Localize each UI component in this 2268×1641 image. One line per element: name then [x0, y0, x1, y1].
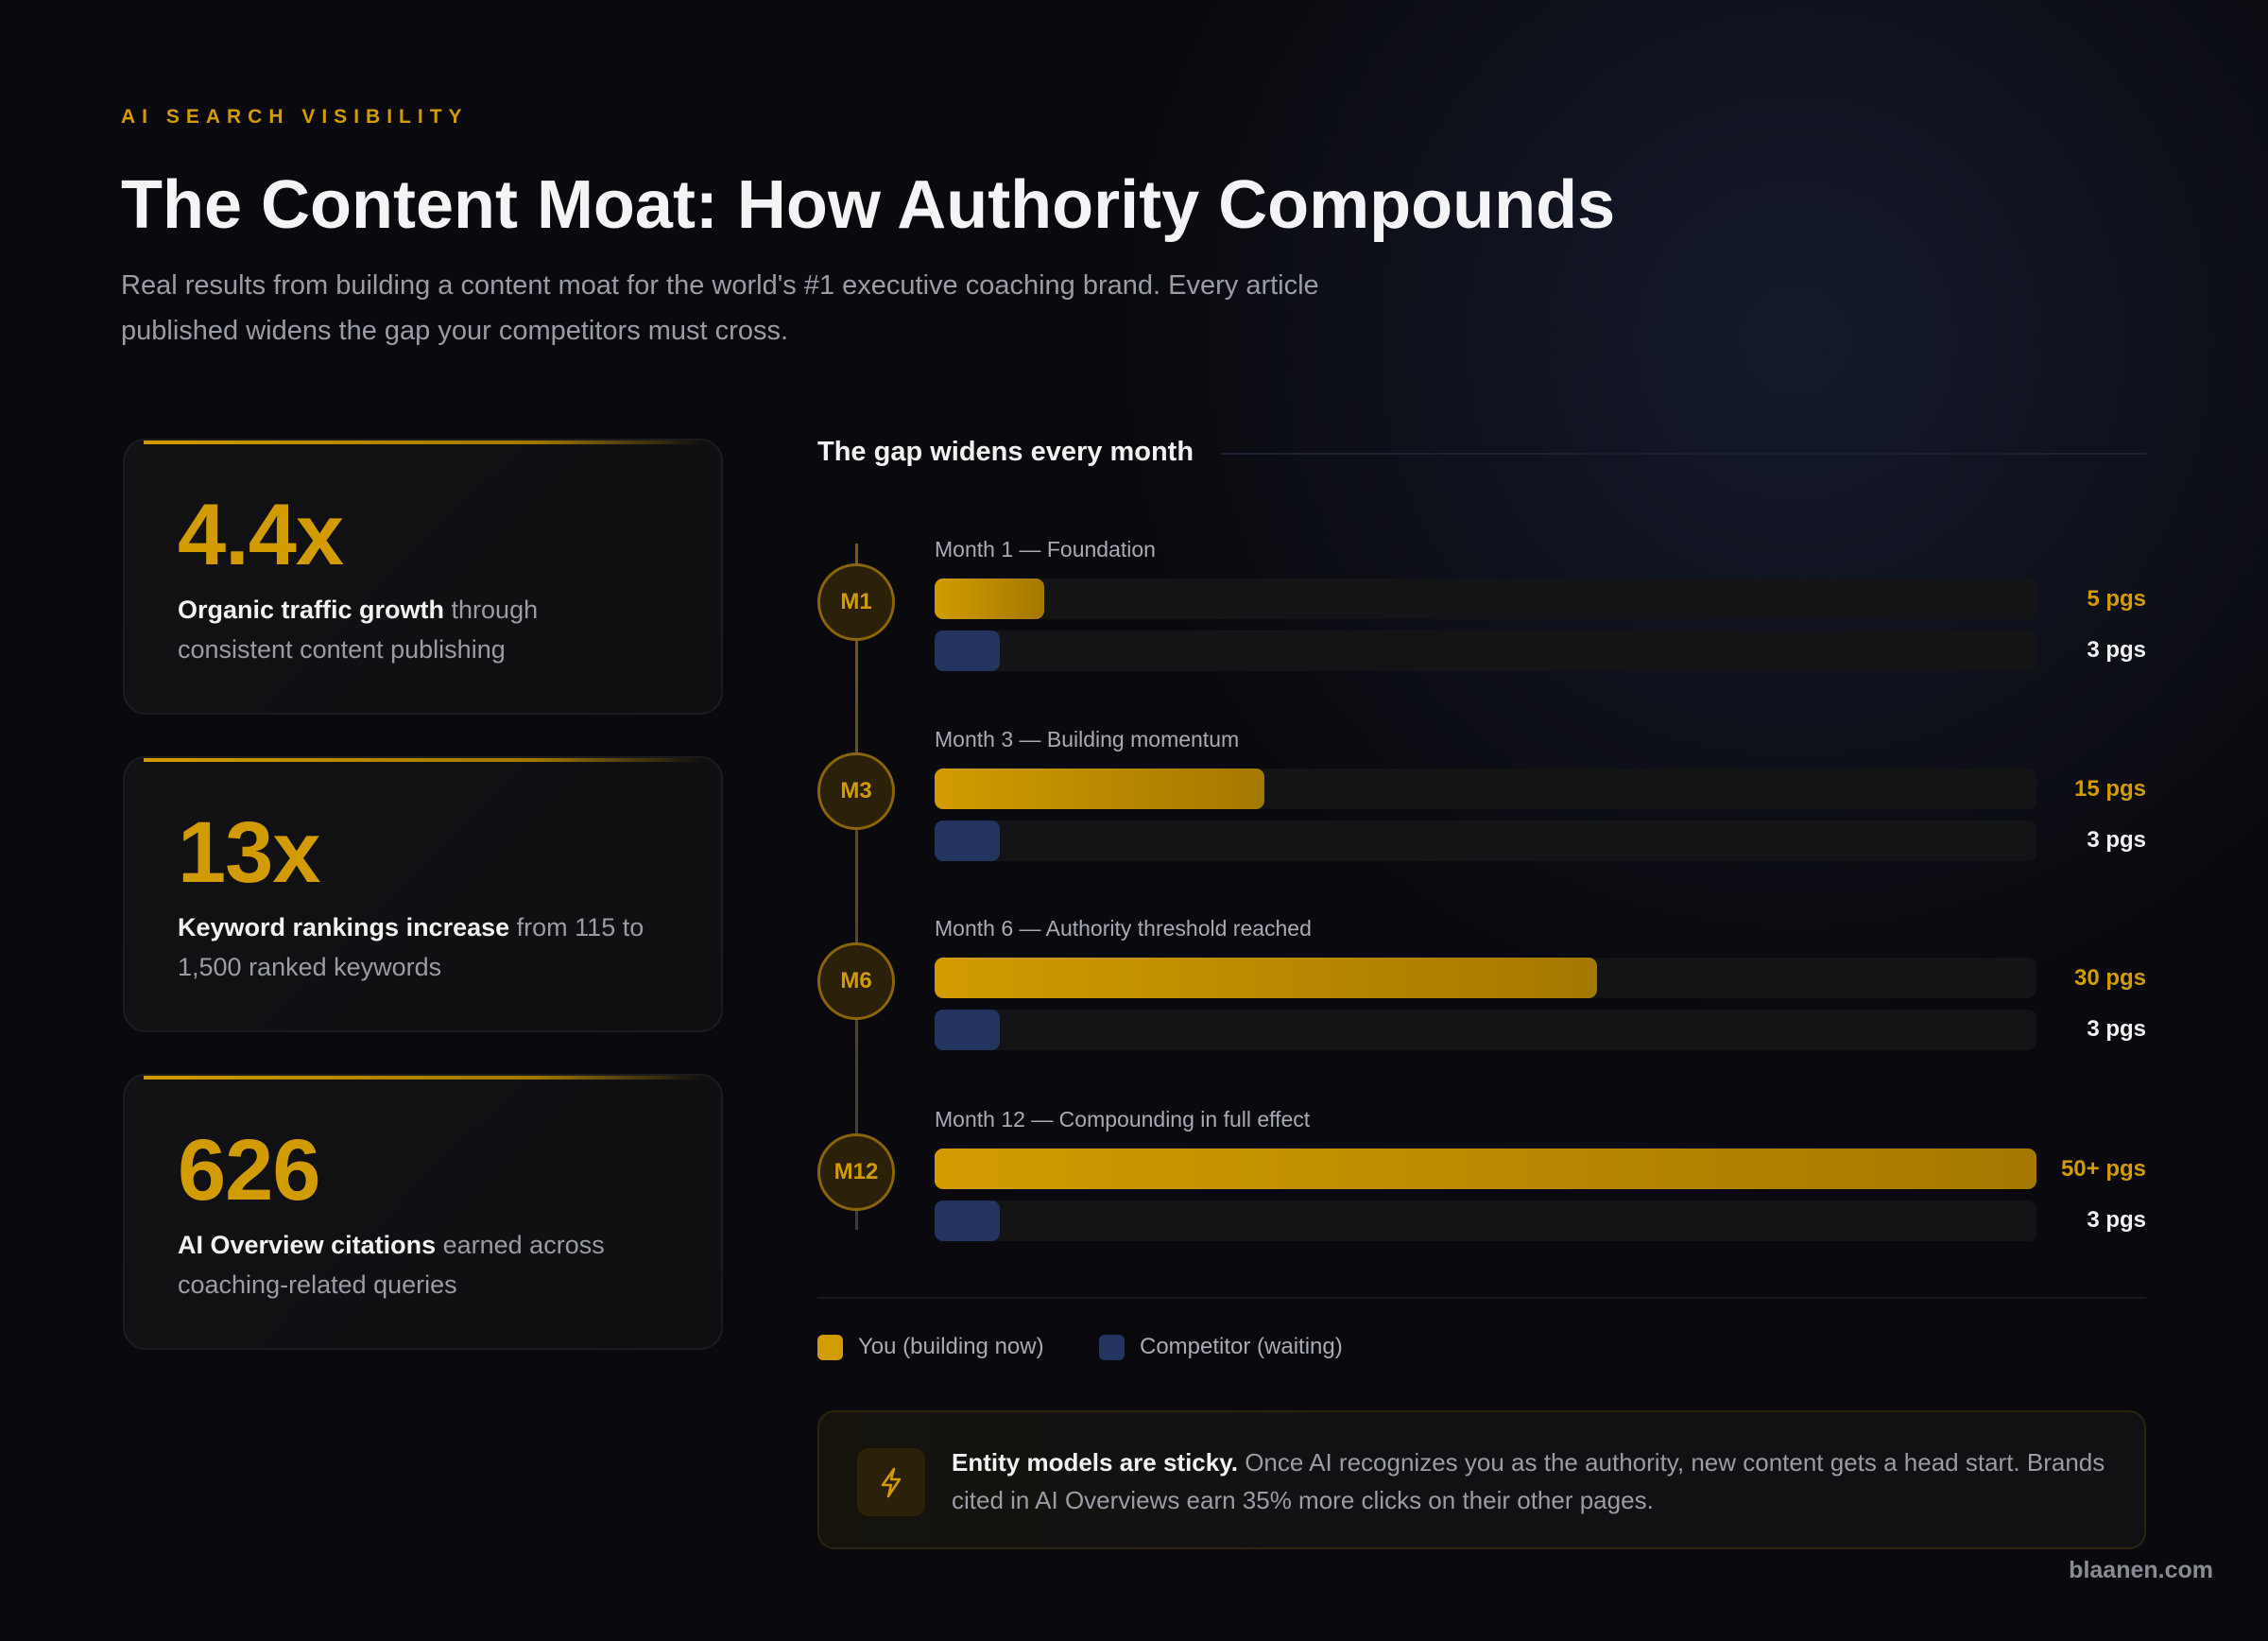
group month 3: 15 pgs: [2074, 776, 2146, 802]
chart heading: The gap widens every month: [817, 437, 1194, 467]
card: traffic growth: [123, 439, 723, 715]
icon: lightning bolt: [857, 1448, 925, 1516]
group month 12: 3 pgs: [2087, 1207, 2146, 1233]
timeline circle M3: M3: [840, 778, 872, 803]
title: The Content Moat: How Authority Compounds: [121, 167, 1615, 243]
subtitle: published widens the gap your competitors must cross.: [121, 316, 788, 346]
group month 3: 3 pgs: [2087, 827, 2146, 853]
timeline circle M6: M6: [840, 968, 872, 993]
timeline circle M12: [817, 1133, 895, 1211]
legend: You (building now): [858, 1334, 1044, 1359]
group month 12: 50+ pgs: [2061, 1156, 2146, 1182]
timeline circle M3: [817, 752, 895, 830]
card text: Keyword rankings increase from 115 to: [178, 913, 644, 941]
legend: [817, 1334, 1343, 1360]
subtitle: [121, 270, 1319, 346]
footer brand: blaanen.com: [2069, 1557, 2213, 1583]
subtitle: Real results from building a content moat for the world's #1 executive coaching brand. Every article: [121, 270, 1319, 301]
legend: Competitor (waiting): [1140, 1334, 1343, 1359]
group month 1: 5 pgs: [2087, 586, 2146, 612]
group month 6: Month 6 — Authority threshold reached: [935, 916, 1312, 941]
card text: Organic traffic growth through: [178, 596, 538, 624]
card: keyword rankings: [123, 756, 723, 1032]
group month 1: 3 pgs: [2087, 637, 2146, 663]
timeline circle M1: [817, 563, 895, 641]
callout: [817, 1410, 2146, 1549]
group month 3: [935, 727, 2146, 861]
group month 3: Month 3 — Building momentum: [935, 727, 1239, 751]
card text: [178, 1231, 605, 1299]
group month 1: Month 1 — Foundation: [935, 537, 1156, 561]
group month 12: [935, 1107, 2146, 1241]
card text: coaching-related queries: [178, 1270, 457, 1299]
group month 6: 30 pgs: [2074, 965, 2146, 991]
timeline circle M6: [817, 942, 895, 1020]
card text: AI Overview citations earned across: [178, 1231, 605, 1259]
eyebrow: AI SEARCH VISIBILITY: [121, 106, 469, 128]
card text: [178, 596, 538, 664]
group month 12: Month 12 — Compounding in full effect: [935, 1107, 1310, 1131]
callout text: Entity models are sticky. Once AI recognizes you as the authority, new content gets a head start. Brands cited in AI Overviews earn 35% more clicks on their other pages.: [952, 1448, 2105, 1514]
timeline circle M1: M1: [840, 589, 872, 614]
group month 1: [935, 537, 2146, 671]
card text: 1,500 ranked keywords: [178, 953, 441, 981]
stat 626: 626: [178, 1122, 319, 1218]
card text: [178, 913, 644, 981]
chart: timeline bars: [855, 544, 858, 1230]
card: AI citations: [123, 1074, 723, 1350]
timeline circle M12: M12: [834, 1159, 878, 1184]
stat 13x: 13x: [178, 804, 319, 901]
group month 6: [935, 916, 2146, 1050]
group month 6: 3 pgs: [2087, 1016, 2146, 1042]
card text: consistent content publishing: [178, 635, 506, 664]
stat 4.4x: 4.4x: [178, 487, 343, 583]
